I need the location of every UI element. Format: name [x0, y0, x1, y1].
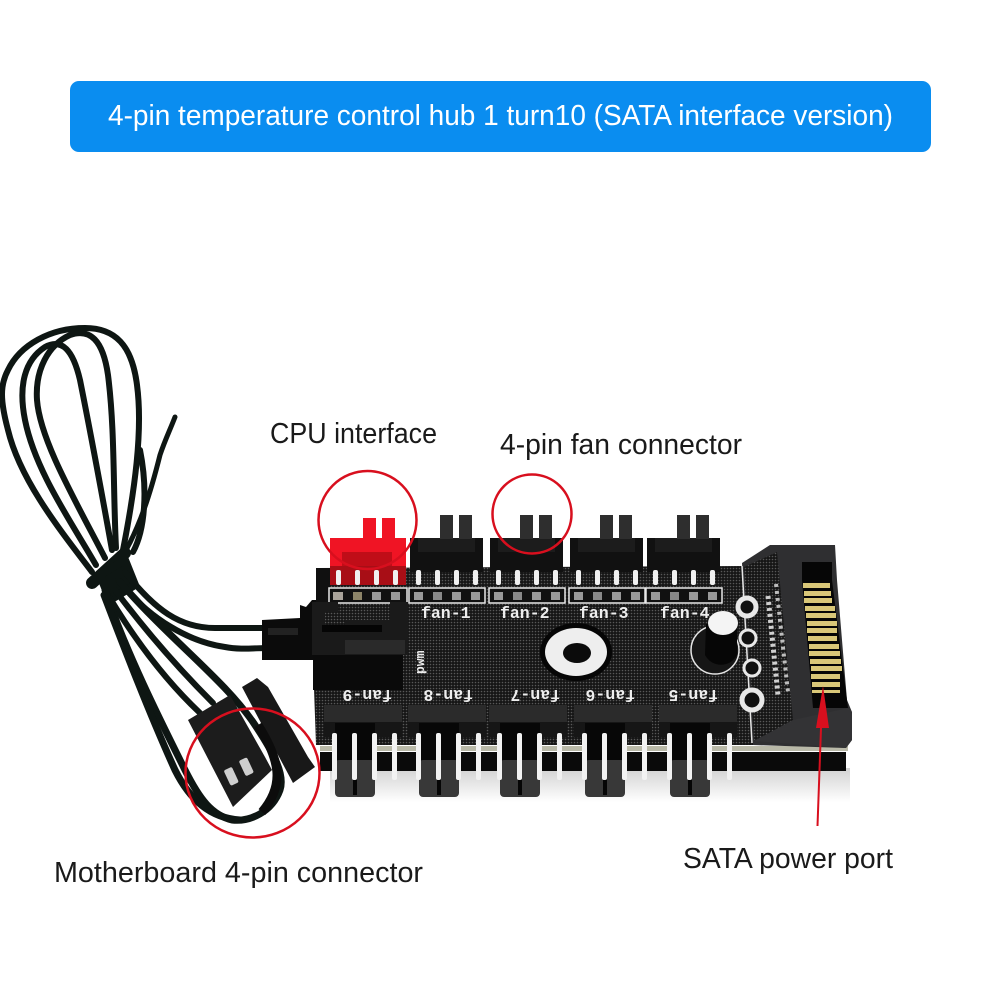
silkscreen labels bottom — [342, 685, 718, 704]
floor shadow — [330, 768, 850, 802]
solder pads — [738, 598, 762, 710]
silkscreen labels top: fan-1 — [421, 604, 471, 623]
title banner — [70, 81, 931, 152]
top fan headers — [409, 515, 722, 603]
small inline connector — [262, 600, 330, 660]
label: CPU interface: CPU interface — [270, 418, 437, 450]
silkscreen labels bottom: fan-5 — [668, 685, 718, 704]
label: 4-pin fan connector: 4-pin fan connector — [500, 429, 742, 461]
silkscreen labels bottom: fan-8 — [423, 685, 473, 704]
capacitor — [691, 611, 739, 674]
circuit board — [313, 566, 755, 745]
silkscreen pwm label: pwm — [413, 650, 428, 674]
silkscreen labels top: fan-4 — [660, 604, 710, 623]
motherboard 4-pin connector plug — [188, 678, 315, 812]
cable bundle — [2, 328, 281, 820]
mounting washer — [540, 623, 612, 681]
underside of board — [320, 746, 848, 771]
bottom fan headers — [324, 705, 737, 797]
silkscreen labels top: fan-3 — [579, 604, 629, 623]
board edge line — [742, 566, 752, 743]
label: SATA power port: SATA power port — [683, 843, 893, 875]
SATA power connector — [742, 545, 852, 748]
highlight circle: CPU interface — [318, 471, 416, 569]
silkscreen labels bottom: fan-7 — [510, 685, 560, 704]
red CPU header — [329, 518, 407, 603]
highlight circle: motherboard connector — [186, 708, 320, 838]
title banner: 4-pin temperature control hub 1 turn10 (SATA interface version) — [108, 100, 893, 132]
silkscreen labels top: fan-2 — [500, 604, 550, 623]
silkscreen labels bottom: fan-6 — [585, 685, 635, 704]
silkscreen labels top — [421, 604, 710, 623]
highlight circle: 4-pin fan connector — [492, 474, 572, 554]
silkscreen labels bottom: fan-9 — [342, 685, 392, 704]
plug on board — [312, 602, 408, 655]
label: Motherboard 4-pin connector: Motherboard 4-pin connector — [54, 857, 423, 889]
arrow: SATA power port — [816, 686, 829, 826]
